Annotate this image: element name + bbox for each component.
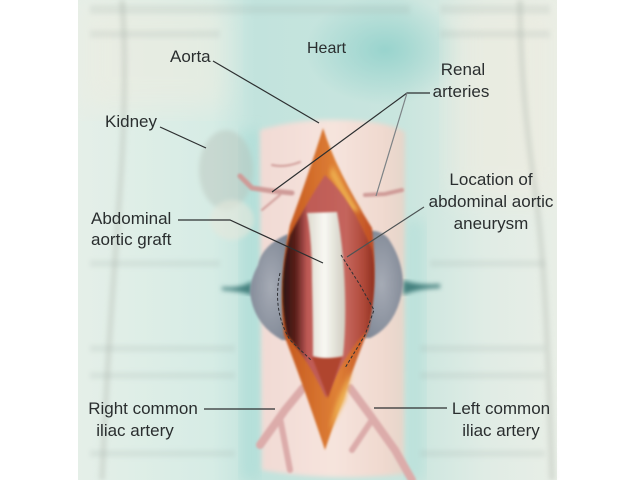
label: Left common iliac artery: Left common bbox=[452, 399, 550, 418]
label: Left common iliac artery: iliac artery bbox=[462, 421, 540, 440]
label: Kidney: Kidney bbox=[105, 112, 157, 131]
faint bleed-through text lines bbox=[90, 5, 550, 457]
iliac arteries bbox=[260, 388, 412, 480]
label: Abdominal aortic graft: aortic graft bbox=[91, 230, 172, 249]
incision flaps bbox=[282, 128, 374, 450]
renal arteries bbox=[240, 162, 402, 210]
label: Location of abdominal aortic aneurysm: Location of bbox=[449, 170, 533, 189]
kidney bbox=[199, 130, 254, 240]
dashed outline of the aneurysm bbox=[278, 255, 374, 368]
label: Right common iliac artery: Right common bbox=[88, 399, 198, 418]
abdominal aortic graft bbox=[307, 212, 345, 358]
faint body outline strokes bbox=[102, 0, 552, 480]
infographic: abdominal aortic graft diagram bbox=[78, 0, 557, 480]
label: Heart: Heart bbox=[307, 40, 347, 57]
left aneurysm bulge bbox=[250, 234, 292, 340]
side shadows of the abdomen bbox=[222, 280, 440, 295]
label: Aorta: Aorta bbox=[170, 47, 211, 66]
leader lines bbox=[160, 61, 447, 409]
label: Right common iliac artery: iliac artery bbox=[96, 421, 174, 440]
lower cavity tissue bbox=[312, 357, 342, 398]
open cavity bbox=[283, 175, 374, 398]
torso skin panel bbox=[260, 120, 405, 477]
label: Location of abdominal aortic aneurysm: aneurysm bbox=[454, 214, 528, 233]
label: Renal arteries: arteries bbox=[433, 82, 489, 101]
flap highlights bbox=[330, 165, 360, 430]
label: Abdominal aortic graft: Abdominal bbox=[91, 209, 171, 228]
illustration background panel bbox=[78, 0, 557, 480]
label: Renal arteries: Renal bbox=[441, 60, 485, 79]
label: Location of abdominal aortic aneurysm: abdominal aortic bbox=[429, 192, 554, 211]
right aneurysm bulge bbox=[360, 231, 403, 338]
